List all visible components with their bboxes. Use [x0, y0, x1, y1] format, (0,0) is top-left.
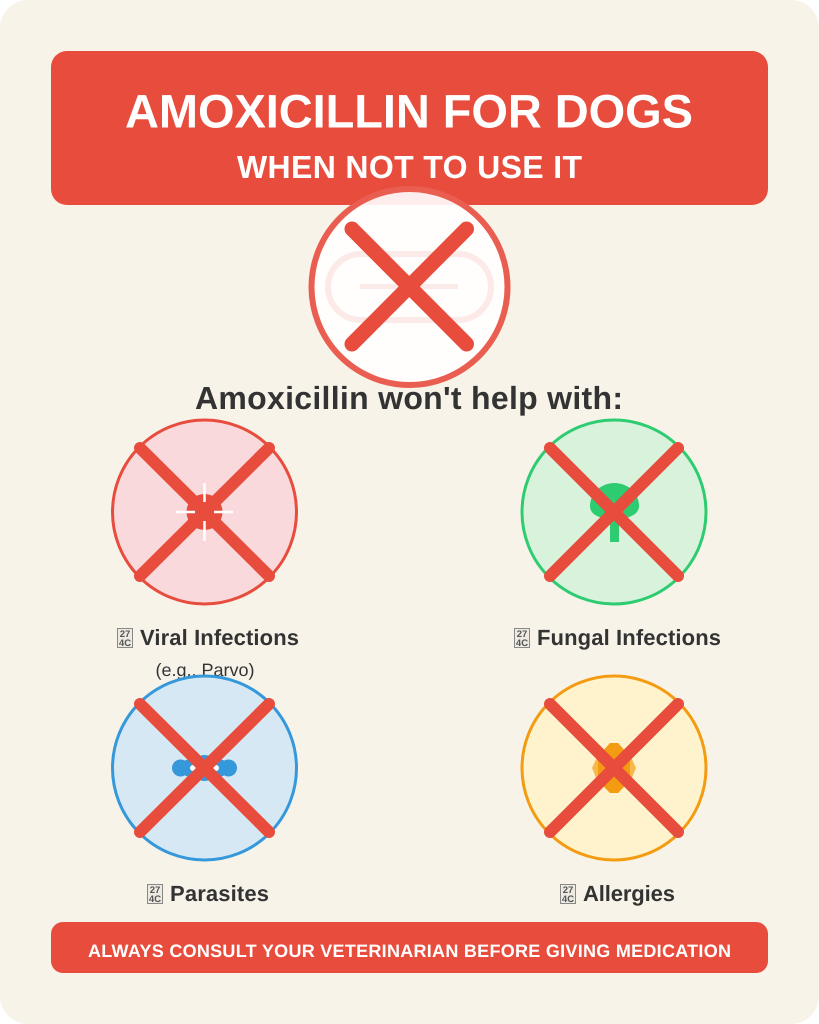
icon: fungus crossed out	[522, 420, 706, 604]
label: viral infections: Viral Infections	[140, 625, 299, 650]
footer banner	[51, 922, 768, 973]
label: fungal infections: 4C	[516, 638, 528, 649]
label: fungal infections: Fungal Infections	[537, 625, 721, 650]
icon: allergen crossed out	[522, 676, 706, 860]
label: fungal infections: 27	[517, 629, 527, 640]
subtitle: WHEN NOT TO USE IT	[237, 149, 582, 185]
label: viral infections: 4C	[119, 638, 131, 649]
label: parasites: 4C	[149, 894, 161, 905]
section heading: Amoxicillin won't help with:	[195, 380, 623, 416]
label: allergies: 4C	[562, 894, 574, 905]
label: parasites: 27	[150, 885, 160, 896]
footer warning text: ALWAYS CONSULT YOUR VETERINARIAN BEFORE GIVING MEDICATION	[88, 941, 731, 961]
title: AMOXICILLIN FOR DOGS	[125, 84, 693, 138]
label: parasites: Parasites	[170, 881, 269, 906]
label: allergies: 27	[563, 885, 573, 896]
icon: virus crossed out	[112, 420, 296, 604]
header banner	[51, 51, 768, 205]
icon: crossed-out pill	[312, 189, 508, 385]
note: parvo example: (e.g., Parvo)	[155, 660, 255, 680]
label: viral infections: 27	[120, 629, 130, 640]
label: allergies: Allergies	[583, 881, 675, 906]
icon: parasite crossed out	[112, 676, 296, 860]
